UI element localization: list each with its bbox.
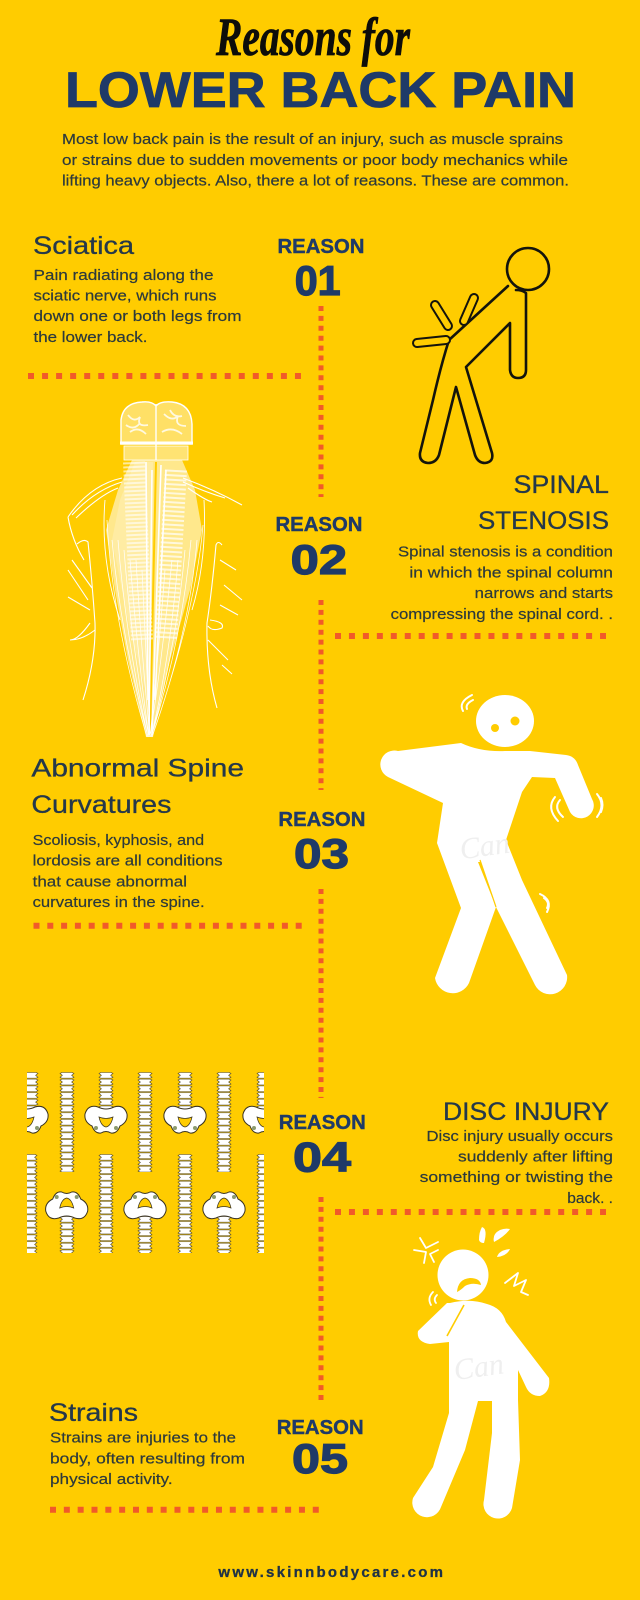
heading: Abnormal Spine Curvatures: Curvatures <box>31 791 171 819</box>
text: Sciatica description: the lower back. <box>34 330 148 346</box>
script heading: Reasons for <box>215 7 411 67</box>
heading: Spinal Stenosis: STENOSIS <box>478 507 609 535</box>
text: Sciatica description <box>34 268 242 346</box>
text: strains description: body, often resulting from <box>50 1451 245 1467</box>
text: disc injury description: back. . <box>567 1191 613 1207</box>
text: curvature description: Scoliosis, kyphosis, and <box>33 833 204 849</box>
heading: Spinal Stenosis <box>478 471 609 535</box>
panel: reason 03 abnormal spine curvatures <box>31 695 602 994</box>
heading: Disc Injury: DISC INJURY <box>443 1098 609 1126</box>
divider <box>335 633 606 639</box>
badge: reason 04: 04 <box>293 1134 352 1181</box>
skull block <box>121 402 192 444</box>
text: Spinal stenosis description: compressing the spinal cord. . <box>391 607 613 623</box>
heading: Abnormal Spine Curvatures <box>31 755 244 819</box>
watermark: Can <box>452 1347 506 1387</box>
text: strains description: Strains are injuries to the <box>50 1430 236 1446</box>
badge: reason 04: REASON <box>279 1111 366 1134</box>
text: disc injury description: Disc injury usually occurs <box>426 1129 613 1145</box>
text: Sciatica description: sciatic nerve, which runs <box>34 289 216 305</box>
text: curvature description: that cause abnormal <box>33 875 187 891</box>
divider <box>28 373 301 379</box>
badge: reason 03 <box>278 808 365 877</box>
intro paragraph: lifting heavy objects. Also, there a lot of reasons. These are common. <box>62 174 569 190</box>
badge: reason 03: 03 <box>294 830 349 877</box>
divider <box>34 923 302 929</box>
icon: white figure twisting <box>380 695 602 994</box>
bottom row <box>22 1154 272 1253</box>
text: Spinal stenosis description: in which the spinal column <box>409 566 613 582</box>
text: curvature description: lordosis are all conditions <box>33 854 223 870</box>
text: Spinal stenosis description: Spinal stenosis is a condition <box>398 545 613 561</box>
heading: Spinal Stenosis: SPINAL <box>514 471 609 499</box>
timeline dotted line <box>318 306 324 1401</box>
intro paragraph: Most low back pain is the result of an injury, such as muscle sprains <box>62 132 563 148</box>
vibration marks <box>462 695 602 912</box>
text: disc injury description: something or twisting the <box>420 1170 613 1186</box>
badge: reason 02: 02 <box>291 536 347 583</box>
badge: reason 05: 05 <box>292 1435 348 1482</box>
shoulder and body outlines <box>68 478 242 560</box>
heading: Sciatica: Sciatica <box>33 232 134 260</box>
badge: reason 05 <box>277 1416 364 1482</box>
divider <box>50 1507 319 1513</box>
watermark: Can <box>458 827 512 866</box>
illustration: spine and pelvis pattern <box>27 1072 264 1253</box>
divider <box>335 1209 606 1215</box>
impact marks <box>417 298 474 343</box>
badge: reason 01: REASON <box>278 235 364 258</box>
footer url: www.skinnbodycare.com <box>217 1564 443 1581</box>
muscle mass <box>106 460 202 737</box>
badge: reason 02: REASON <box>276 513 362 536</box>
text: disc injury description: suddenly after lifting <box>458 1150 613 1166</box>
panel: reason 05 strains <box>49 1227 549 1519</box>
text: Spinal stenosis description <box>391 545 613 623</box>
text: curvature description: curvatures in the spine. <box>33 895 205 911</box>
main heading: LOWER BACK PAIN <box>65 62 576 118</box>
text: disc injury description <box>420 1129 613 1207</box>
intro paragraph <box>62 132 569 190</box>
intro paragraph: or strains due to sudden movements or poor body mechanics while <box>62 153 568 169</box>
badge: reason 05: REASON <box>277 1416 364 1439</box>
text: strains description: physical activity. <box>50 1472 173 1488</box>
text: curvature description <box>33 833 223 911</box>
badge: reason 01: 01 <box>295 257 341 304</box>
badge: reason 03: REASON <box>278 808 365 831</box>
badge: reason 04 <box>279 1111 366 1181</box>
illustration: back muscles engraving <box>68 402 242 737</box>
pain marks <box>414 1238 528 1305</box>
heading: Strains: Strains <box>49 1399 138 1427</box>
heading: Abnormal Spine Curvatures: Abnormal Spine <box>31 755 244 783</box>
text: strains description <box>50 1430 245 1488</box>
top row <box>27 1072 264 1172</box>
panel: reason 04 disc injury <box>6 1072 613 1253</box>
title <box>65 7 576 118</box>
text: Sciatica description: Pain radiating along the <box>34 268 214 284</box>
text: Spinal stenosis description: narrows and starts <box>475 586 613 602</box>
badge: reason 02 <box>276 513 362 583</box>
text: Sciatica description: down one or both legs from <box>34 309 242 325</box>
panel: reason 01 sciatica <box>28 232 549 463</box>
panel: reason 02 spinal stenosis <box>68 402 613 737</box>
badge: reason 01 <box>278 235 364 304</box>
icon: white figure with neck pain <box>412 1227 549 1519</box>
icon: outlined figure holding back <box>417 248 549 463</box>
